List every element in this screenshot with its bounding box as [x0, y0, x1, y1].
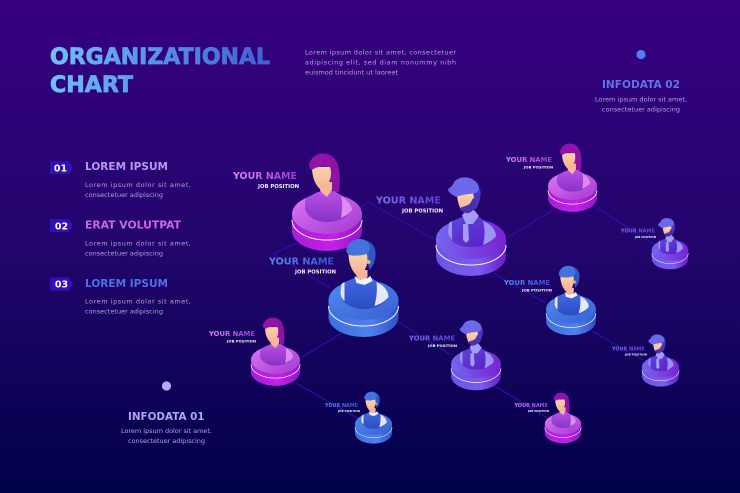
list item 01	[50, 161, 191, 199]
list item 03: consectetuer adipiscing	[85, 308, 163, 316]
label: left woman	[208, 329, 256, 344]
infodata 02: Lorem ipsum dolor sit amet,	[595, 96, 687, 104]
label: top right woman: YOUR NAME	[505, 155, 552, 164]
title: CHART	[50, 73, 133, 98]
label: large woman	[232, 171, 299, 190]
list item 03: 03	[55, 280, 68, 290]
label: large woman: JOB POSITION	[257, 184, 299, 190]
label: bottom woman: JOB POSITION	[527, 409, 549, 413]
node: middle right blue man	[546, 266, 596, 335]
infodata 02: INFODATA 02	[602, 80, 680, 91]
label: middle right blue man	[503, 278, 552, 292]
label: top right woman	[505, 155, 553, 170]
label: top right woman: JOB POSITION	[523, 166, 553, 170]
label: middle right blue man: JOB POSITION	[521, 288, 552, 292]
infodata 02: consectetuer adipiscing	[602, 106, 680, 114]
list item 03	[50, 278, 191, 316]
label: bottom woman	[514, 403, 549, 413]
label: bottom woman: YOUR NAME	[514, 403, 548, 409]
label: large blue man	[268, 256, 336, 276]
title	[50, 45, 270, 98]
label: center bearded man	[408, 334, 457, 348]
node: bottom blue man	[355, 392, 392, 444]
connector lines	[273, 202, 655, 418]
list item 03: LOREM IPSUM	[85, 278, 168, 290]
list item 01: LOREM IPSUM	[85, 161, 168, 173]
label: center bearded man: YOUR NAME	[408, 334, 455, 342]
label: bottom blue man: YOUR NAME	[324, 403, 358, 409]
label: large bearded man: YOUR NAME	[375, 196, 441, 206]
label: far right bearded man: JOB POSITION	[634, 235, 656, 239]
label: left woman: YOUR NAME	[208, 329, 255, 338]
infodata 01	[121, 381, 212, 445]
intro text: Lorem ipsum dolor sit amet, consectetuer	[305, 48, 456, 56]
list item 01: Lorem ipsum dolor sit amet,	[85, 181, 191, 189]
list item 02: 02	[55, 222, 68, 232]
list item 01: consectetuer adipiscing	[85, 191, 163, 199]
infodata 02	[595, 50, 687, 114]
node: bottom woman	[545, 393, 581, 443]
label: center bearded man: JOB POSITION	[427, 344, 457, 348]
label: lower right bearded man	[611, 346, 647, 356]
intro text	[305, 48, 456, 76]
infodata 01: INFODATA 01	[128, 412, 204, 423]
label: lower right bearded man: YOUR NAME	[611, 346, 645, 352]
node: large blue man	[328, 239, 398, 337]
node: top right woman	[548, 144, 597, 212]
node: lower right bearded man	[642, 334, 679, 387]
intro text: adipiscing elit, sed diam nonummy nibh	[305, 58, 456, 66]
list item 02: consectetuer adipiscing	[85, 250, 163, 258]
label: lower right bearded man: JOB POSITION	[624, 352, 647, 356]
node: large bearded man	[436, 177, 506, 276]
label: large bearded man: JOB POSITION	[401, 208, 443, 214]
node: far right bearded man	[652, 218, 688, 269]
title: ORGANIZATIONAL	[50, 45, 270, 70]
node: left woman	[251, 318, 300, 386]
intro text: euismod tincidunt ut laoreet	[305, 68, 398, 76]
label: far right bearded man: YOUR NAME	[620, 228, 655, 234]
label: bottom blue man: JOB POSITION	[337, 409, 360, 413]
list item 02: ERAT VOLUTPAT	[85, 220, 182, 232]
label: large bearded man	[375, 196, 443, 214]
label: far right bearded man	[620, 228, 656, 239]
label: left woman: JOB POSITION	[226, 340, 256, 344]
list item 02	[50, 219, 191, 258]
node: center bearded man	[451, 320, 501, 390]
list item 02: Lorem ipsum dolor sit amet,	[85, 240, 191, 248]
node: large woman	[292, 153, 362, 251]
list item 01: 01	[54, 164, 67, 174]
label: large woman: YOUR NAME	[232, 171, 297, 182]
label: large blue man: JOB POSITION	[294, 270, 336, 276]
label: bottom blue man	[324, 403, 360, 413]
label: large blue man: YOUR NAME	[268, 256, 334, 268]
infodata 01: Lorem ipsum dolor sit amet,	[121, 427, 212, 435]
label: middle right blue man: YOUR NAME	[503, 278, 550, 287]
list item 03: Lorem ipsum dolor sit amet,	[85, 298, 191, 306]
infodata 01: consectetuer adipiscing	[128, 437, 205, 445]
